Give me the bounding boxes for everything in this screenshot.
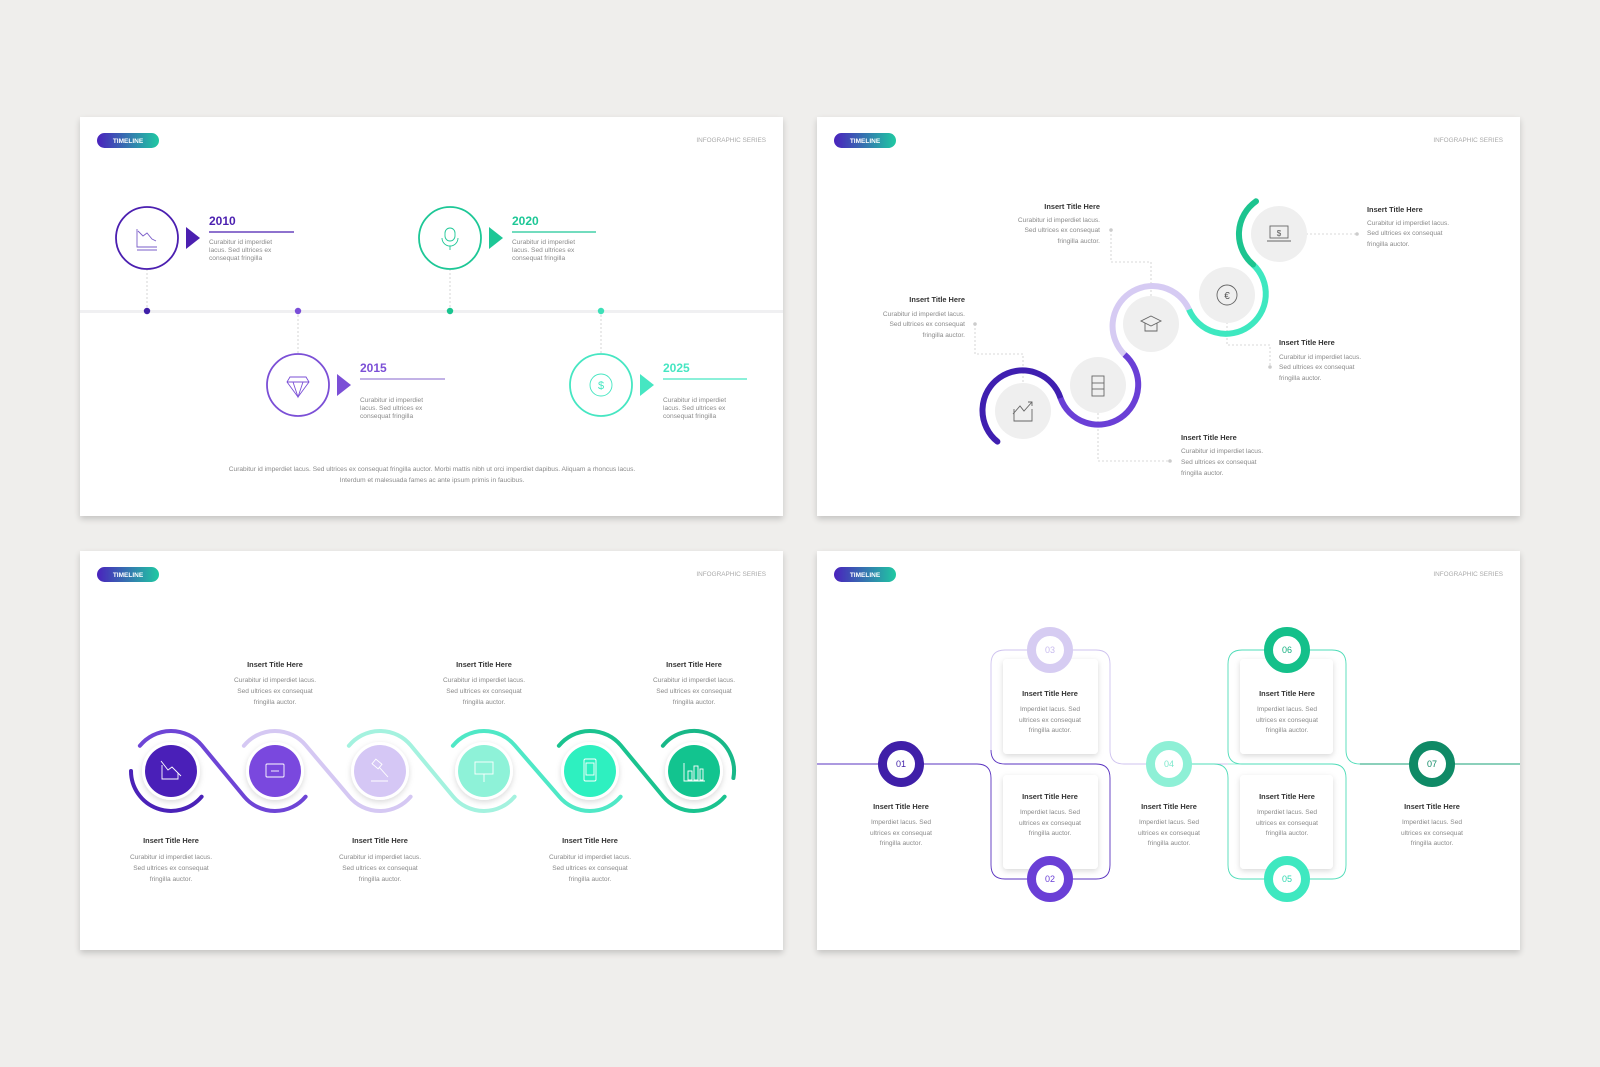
- step circles: [995, 206, 1307, 439]
- label: top right: Insert Title Here: [1367, 205, 1423, 214]
- label: left: fringilla auctor.: [922, 332, 965, 339]
- step texts: Insert Title Here: [1022, 689, 1078, 698]
- labels below: [130, 836, 631, 883]
- panel: numbered steps: 01: [896, 759, 906, 769]
- milestone 2020: 2020: [512, 214, 539, 228]
- labels above: Curabitur id imperdiet lacus.: [443, 677, 525, 684]
- label: bottom: Curabitur id imperdiet lacus.: [1181, 448, 1263, 455]
- milestone 2015: [267, 354, 445, 420]
- label: top right: fringilla auctor.: [1367, 241, 1410, 248]
- labels below: Insert Title Here: [562, 836, 618, 845]
- step texts: Imperdiet lacus. Sed: [1020, 706, 1080, 713]
- step texts: Insert Title Here: [1141, 802, 1197, 811]
- panel: numbered steps: 06: [1282, 645, 1292, 655]
- label: middle right: Curabitur id imperdiet lacus.: [1279, 354, 1361, 361]
- timeline dots: [144, 308, 604, 314]
- milestone 2020: lacus. Sed ultrices ex: [512, 247, 575, 254]
- step texts: ultrices ex consequat: [1401, 830, 1463, 837]
- step texts: fringilla auctor.: [1029, 830, 1071, 837]
- wave path: [982, 201, 1266, 442]
- label: bottom: [1181, 433, 1263, 477]
- label dots: [973, 228, 1359, 463]
- labels below: Insert Title Here: [352, 836, 408, 845]
- labels below: Sed ultrices ex consequat: [342, 865, 418, 872]
- milestone 2010: lacus. Sed ultrices ex: [209, 247, 272, 254]
- labels below: Curabitur id imperdiet lacus.: [549, 854, 631, 861]
- label: left: [883, 295, 965, 339]
- labels above: fringilla auctor.: [254, 699, 296, 706]
- milestone 2025: $: [598, 380, 604, 392]
- labels below: Sed ultrices ex consequat: [552, 865, 628, 872]
- labels above: Sed ultrices ex consequat: [237, 688, 313, 695]
- labels above: Curabitur id imperdiet lacus.: [653, 677, 735, 684]
- labels above: [234, 660, 735, 706]
- label: top right: [1367, 205, 1449, 248]
- panel: snake timeline: $: [1277, 229, 1282, 238]
- number rings: [882, 632, 1450, 898]
- labels below: Insert Title Here: [143, 836, 199, 845]
- label: middle right: fringilla auctor.: [1279, 375, 1322, 382]
- step texts: ultrices ex consequat: [1019, 717, 1081, 724]
- step texts: ultrices ex consequat: [870, 830, 932, 837]
- cards: [1003, 659, 1333, 869]
- step texts: fringilla auctor.: [1029, 727, 1071, 734]
- labels below: Sed ultrices ex consequat: [133, 865, 209, 872]
- milestone 2020: [419, 207, 596, 269]
- circles: [142, 742, 723, 800]
- step texts: ultrices ex consequat: [1256, 717, 1318, 724]
- label: middle right: Sed ultrices ex consequat: [1279, 364, 1355, 371]
- footer paragraph: [229, 466, 635, 484]
- step texts: ultrices ex consequat: [1138, 830, 1200, 837]
- timeline pill: TIMELINE: [113, 572, 144, 579]
- step texts: [870, 689, 1463, 847]
- panel: snake timeline: [817, 117, 1520, 516]
- labels below: fringilla auctor.: [359, 876, 401, 883]
- label: bottom: fringilla auctor.: [1181, 470, 1224, 477]
- milestone 2015: consequat fringilla: [360, 413, 413, 420]
- milestone 2025: lacus. Sed ultrices ex: [663, 405, 726, 412]
- label: bottom: Sed ultrices ex consequat: [1181, 459, 1257, 466]
- label: left: Sed ultrices ex consequat: [889, 321, 965, 328]
- label: bottom: Insert Title Here: [1181, 433, 1237, 442]
- icons: [161, 759, 705, 782]
- label: left: Curabitur id imperdiet lacus.: [883, 311, 965, 318]
- label: left: Insert Title Here: [909, 295, 965, 304]
- step texts: Imperdiet lacus. Sed: [1139, 819, 1199, 826]
- panel: numbered steps: 07: [1427, 759, 1437, 769]
- series label: INFOGRAPHIC SERIES: [1433, 571, 1503, 578]
- step texts: fringilla auctor.: [1411, 840, 1453, 847]
- step texts: fringilla auctor.: [1266, 727, 1308, 734]
- timeline pill: TIMELINE: [850, 138, 881, 145]
- step texts: Insert Title Here: [1404, 802, 1460, 811]
- label: top: [1018, 202, 1100, 245]
- milestone 2010: Curabitur id imperdiet: [209, 239, 272, 246]
- step texts: Imperdiet lacus. Sed: [871, 819, 931, 826]
- milestone 2015: 2015: [360, 361, 387, 375]
- step texts: Insert Title Here: [1022, 792, 1078, 801]
- timeline pill: [834, 133, 896, 148]
- step texts: Imperdiet lacus. Sed: [1020, 809, 1080, 816]
- milestone 2010: [116, 207, 294, 269]
- panel: numbered steps: 05: [1282, 874, 1292, 884]
- milestone 2010: consequat fringilla: [209, 255, 262, 262]
- step texts: Imperdiet lacus. Sed: [1402, 819, 1462, 826]
- step texts: Imperdiet lacus. Sed: [1257, 706, 1317, 713]
- labels above: Insert Title Here: [456, 660, 512, 669]
- label: top: Sed ultrices ex consequat: [1024, 227, 1100, 234]
- milestone 2010: 2010: [209, 214, 236, 228]
- milestone 2020: consequat fringilla: [512, 255, 565, 262]
- footer paragraph: Interdum et malesuada fames ac ante ipsum primis in faucibus.: [340, 477, 525, 484]
- series label: INFOGRAPHIC SERIES: [696, 571, 766, 578]
- series label: INFOGRAPHIC SERIES: [696, 137, 766, 144]
- labels above: Sed ultrices ex consequat: [446, 688, 522, 695]
- labels below: Curabitur id imperdiet lacus.: [339, 854, 421, 861]
- panel: timeline years: [80, 117, 783, 516]
- milestone 2025: Curabitur id imperdiet: [663, 397, 726, 404]
- step texts: ultrices ex consequat: [1256, 820, 1318, 827]
- timeline pill: [97, 567, 159, 582]
- labels below: Curabitur id imperdiet lacus.: [130, 854, 212, 861]
- milestone 2025: 2025: [663, 361, 690, 375]
- footer paragraph: Curabitur id imperdiet lacus. Sed ultrices ex consequat fringilla auctor. Morbi mattis nibh ut orci imperdiet dapibus. Aliquam a rhoncus lacus.: [229, 466, 635, 473]
- labels below: fringilla auctor.: [569, 876, 611, 883]
- labels above: fringilla auctor.: [463, 699, 505, 706]
- milestone 2020: Curabitur id imperdiet: [512, 239, 575, 246]
- step texts: fringilla auctor.: [1148, 840, 1190, 847]
- step texts: Insert Title Here: [1259, 792, 1315, 801]
- timeline pill: TIMELINE: [850, 572, 881, 579]
- labels above: Insert Title Here: [247, 660, 303, 669]
- timeline pill: [834, 567, 896, 582]
- step texts: Insert Title Here: [1259, 689, 1315, 698]
- panel: numbered steps: 02: [1045, 874, 1055, 884]
- label: top right: Curabitur id imperdiet lacus.: [1367, 220, 1449, 227]
- labels above: Curabitur id imperdiet lacus.: [234, 677, 316, 684]
- panel: snake timeline: €: [1224, 291, 1230, 302]
- label: top: Insert Title Here: [1044, 202, 1100, 211]
- milestone 2025: consequat fringilla: [663, 413, 716, 420]
- labels above: Sed ultrices ex consequat: [656, 688, 732, 695]
- step texts: fringilla auctor.: [1266, 830, 1308, 837]
- panel: numbered steps: 03: [1045, 645, 1055, 655]
- wave: [131, 731, 734, 811]
- label: top right: Sed ultrices ex consequat: [1367, 230, 1443, 237]
- step texts: Insert Title Here: [873, 802, 929, 811]
- label: top: Curabitur id imperdiet lacus.: [1018, 217, 1100, 224]
- step texts: ultrices ex consequat: [1019, 820, 1081, 827]
- label: middle right: [1279, 338, 1361, 382]
- icons: [1013, 226, 1291, 421]
- label: top: fringilla auctor.: [1057, 238, 1100, 245]
- labels below: fringilla auctor.: [150, 876, 192, 883]
- milestone 2015: Curabitur id imperdiet: [360, 397, 423, 404]
- milestone 2015: lacus. Sed ultrices ex: [360, 405, 423, 412]
- series label: INFOGRAPHIC SERIES: [1433, 137, 1503, 144]
- panel: numbered steps: 04: [1164, 759, 1174, 769]
- step texts: fringilla auctor.: [880, 840, 922, 847]
- label: middle right: Insert Title Here: [1279, 338, 1335, 347]
- panel: numbered steps: [817, 551, 1520, 950]
- milestone 2025: [570, 354, 747, 420]
- panel: wave timeline: [80, 551, 783, 950]
- labels above: Insert Title Here: [666, 660, 722, 669]
- timeline pill: [97, 133, 159, 148]
- step texts: Imperdiet lacus. Sed: [1257, 809, 1317, 816]
- timeline pill: TIMELINE: [113, 138, 144, 145]
- labels above: fringilla auctor.: [673, 699, 715, 706]
